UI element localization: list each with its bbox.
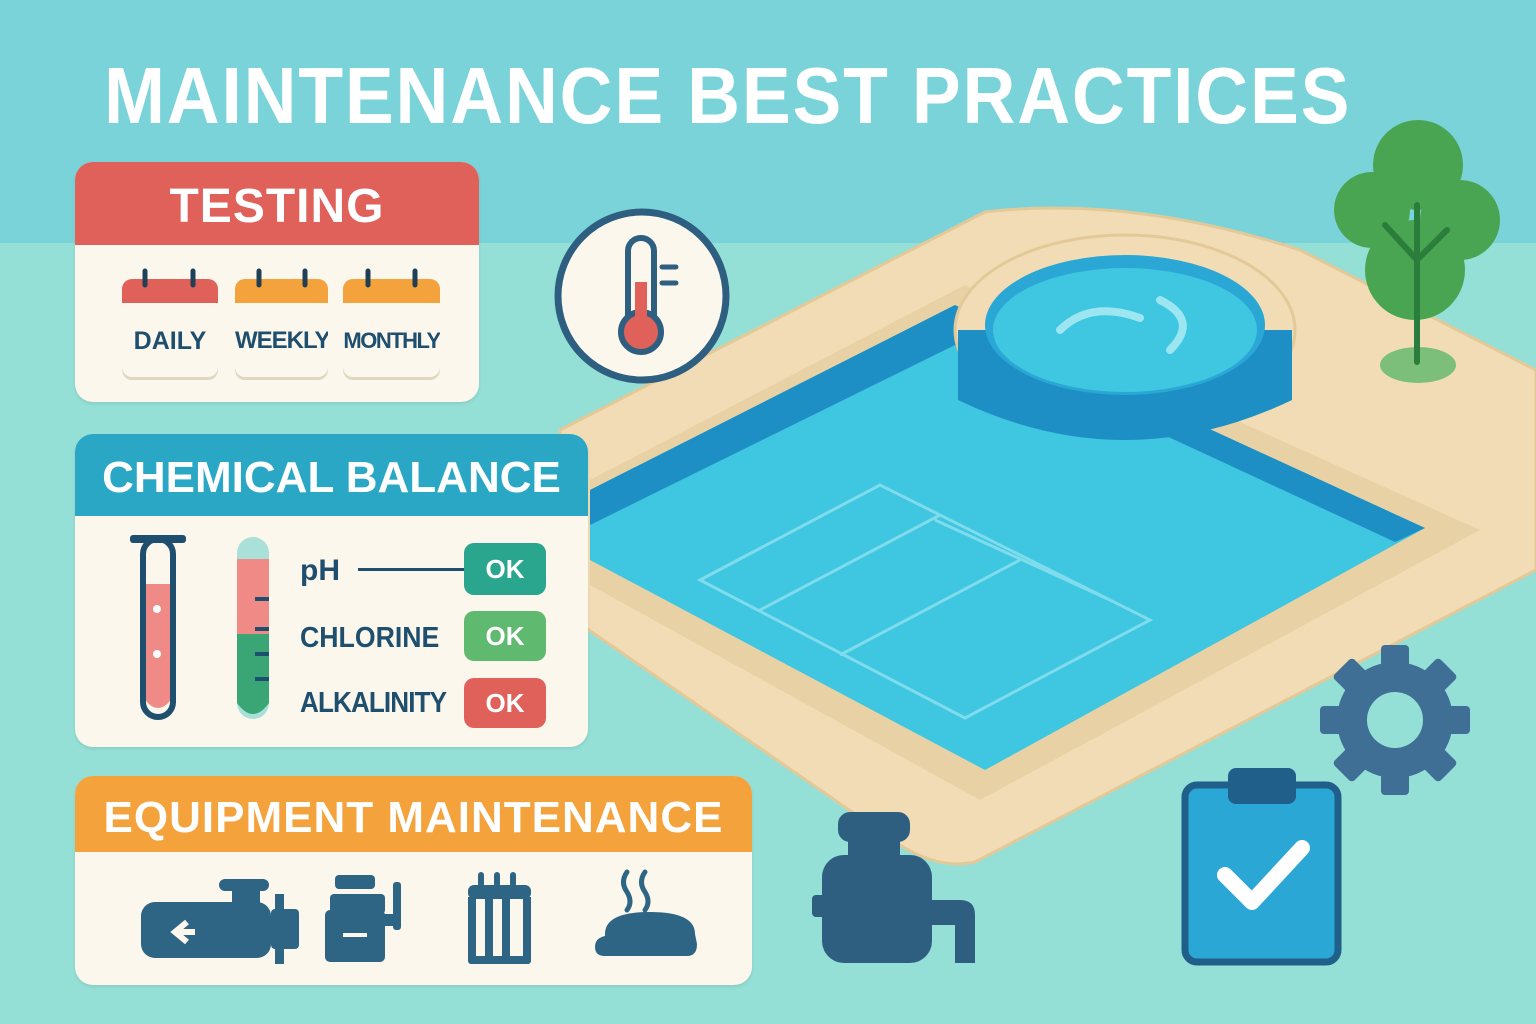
icon: thermometer xyxy=(558,212,726,380)
chemical rows: OK xyxy=(486,621,524,651)
panel: chemical balance xyxy=(75,434,588,747)
calendar: monthly: MONTHLY xyxy=(343,328,440,353)
heading: testing: TESTING xyxy=(169,180,384,233)
calendar: monthly xyxy=(343,279,440,377)
heading: testing xyxy=(75,162,479,245)
icon: pump xyxy=(812,812,975,963)
calendar: weekly xyxy=(235,279,328,377)
heading: equipment maintenance: EQUIPMENT MAINTENANCE xyxy=(104,793,723,842)
icon: gear xyxy=(1320,645,1470,795)
chemical rows: OK xyxy=(486,554,524,584)
pool deck xyxy=(560,208,1536,864)
chemical rows: OK xyxy=(486,688,524,718)
spa xyxy=(955,235,1295,440)
chemical rows: pH xyxy=(300,554,340,587)
heading: chemical balance xyxy=(75,434,588,516)
heading: equipment maintenance xyxy=(75,776,752,852)
icon: clipboard xyxy=(1185,768,1338,962)
equipment icons xyxy=(141,870,697,964)
calendar: daily xyxy=(122,279,218,377)
chemical rows: ALKALINITY xyxy=(300,687,446,719)
heading: chemical balance: CHEMICAL BALANCE xyxy=(102,453,561,502)
title: MAINTENANCE BEST PRACTICES xyxy=(104,51,1351,140)
calendars xyxy=(122,268,440,380)
chemical rows xyxy=(300,543,546,728)
chemical rows: CHLORINE xyxy=(300,622,439,654)
panel: testing xyxy=(75,162,479,402)
calendar: weekly: WEEKLY xyxy=(235,327,328,354)
pool water xyxy=(590,305,1425,770)
panel: equipment maintenance xyxy=(75,776,752,985)
calendar: daily: DAILY xyxy=(134,327,206,355)
icon: tree xyxy=(1334,120,1500,383)
icon: test tubes xyxy=(130,535,269,720)
